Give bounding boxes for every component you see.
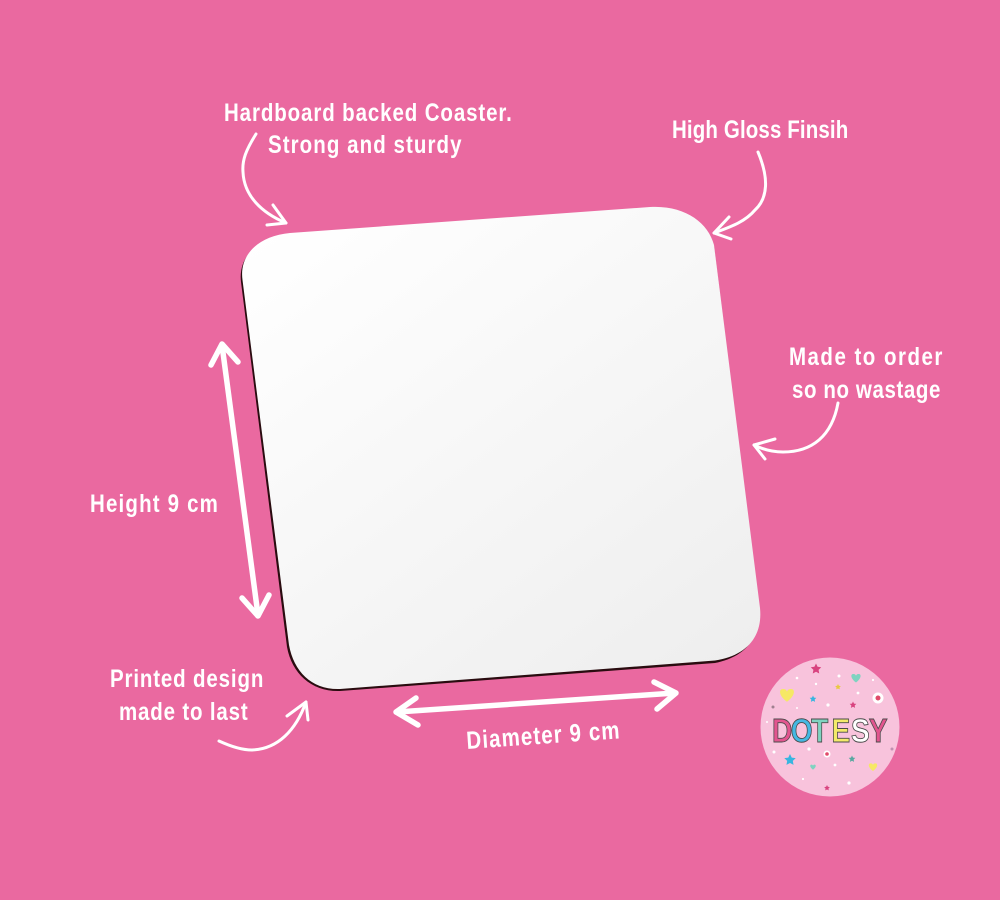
text: diameter: Diameter 9 cm <box>465 715 620 754</box>
arrow: hardboard <box>243 134 286 225</box>
text: printed design <box>110 664 263 725</box>
text: made to order <box>789 342 942 403</box>
text: hardboard backed coaster <box>224 98 512 158</box>
arrow: height <box>211 344 269 616</box>
text: printed design: made to last <box>119 697 248 725</box>
text: high gloss finish: High Gloss Finsih <box>672 115 848 143</box>
arrow: made to order <box>754 403 838 459</box>
text: made to order: so no wastage <box>792 375 940 403</box>
text: made to order: Made to order <box>789 342 942 370</box>
text: hardboard backed coaster: Strong and sturdy <box>268 130 462 158</box>
arrow: diameter <box>396 682 676 725</box>
arrow: high gloss <box>714 152 766 239</box>
text: height: Height 9 cm <box>90 489 218 517</box>
logo wordmark: DOTESY <box>772 713 888 750</box>
text: hardboard backed coaster: Hardboard backed Coaster. <box>224 98 512 126</box>
arrow: printed design <box>219 702 308 750</box>
logo: dotesy <box>760 658 900 796</box>
text: printed design: Printed design <box>110 664 263 692</box>
logo decorations <box>766 664 894 790</box>
coaster <box>241 207 760 691</box>
